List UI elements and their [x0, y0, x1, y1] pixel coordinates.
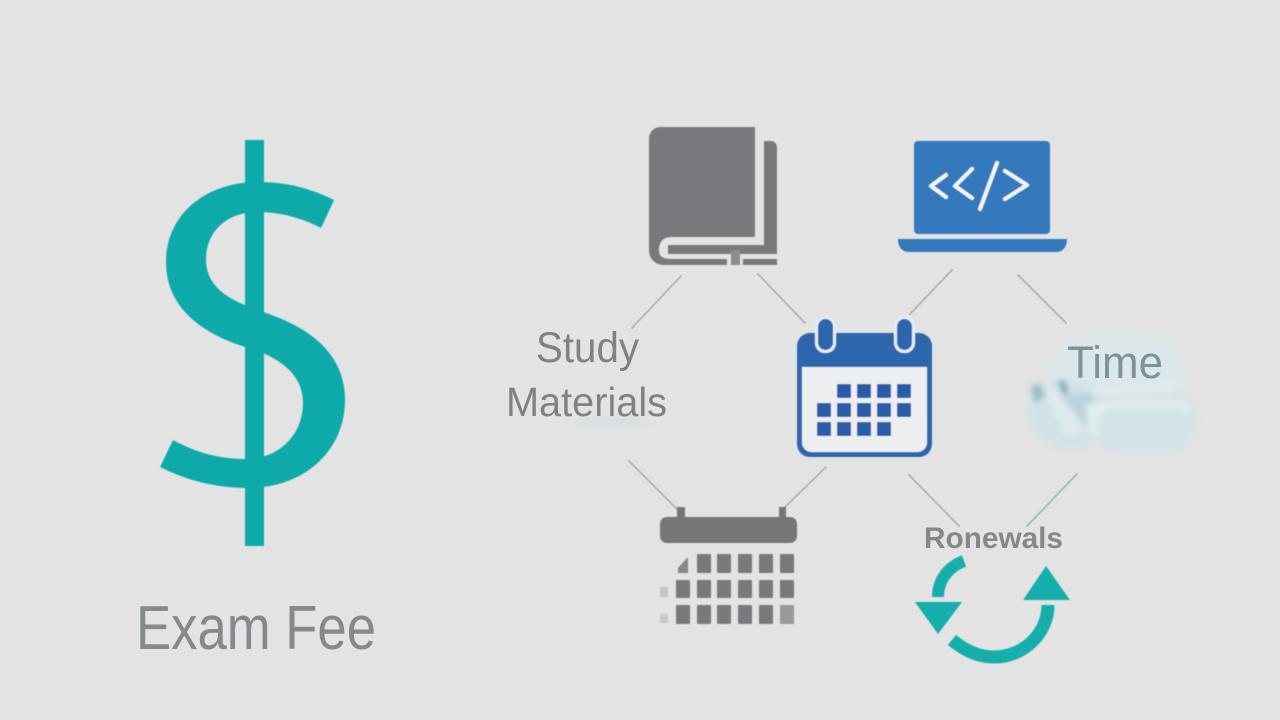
label: Study Materials — [506, 324, 667, 428]
icon: gray calendar — [660, 507, 797, 624]
icon: book — [649, 127, 777, 265]
icon: blue calendar — [797, 317, 932, 457]
icon: renewal arrows — [915, 561, 1070, 657]
icon: dollar sign — [160, 140, 345, 546]
label: Study Materials: Study — [536, 324, 639, 372]
heading: Exam Fee: Exam Fee — [136, 594, 376, 663]
label: Renewals: Ronewals — [924, 522, 1063, 555]
icon and label: Time: Time — [1067, 337, 1163, 388]
icon and label: Time — [1028, 330, 1200, 454]
connector lines — [629, 270, 1077, 526]
label: Study Materials: Materials — [506, 379, 667, 425]
icon: laptop with code — [898, 141, 1067, 252]
